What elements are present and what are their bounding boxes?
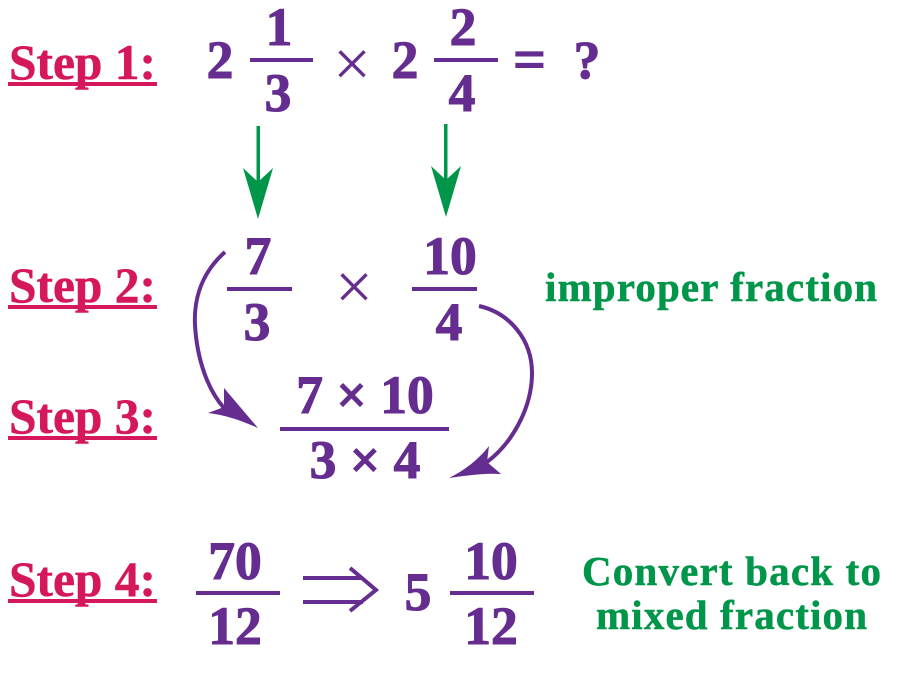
equation: step 1 mixed fractions: 2 <box>207 30 233 90</box>
heading: step 4: Step 4: <box>9 551 156 607</box>
equation: step 4 result: 70 <box>208 531 262 591</box>
arrow: second mixed fraction down <box>431 124 461 217</box>
equation: step 2 improper fractions: 4 <box>436 292 462 352</box>
heading: step 1: Step 1: <box>9 34 156 90</box>
equation: step 1 mixed fractions: 4 <box>449 63 475 123</box>
arrow: left curve to numerator <box>195 252 258 428</box>
equation: step 2 improper fractions: 3 <box>244 292 270 352</box>
arrow: right curve to denominator <box>449 306 532 478</box>
equation: step 4 result: 12 <box>208 596 262 656</box>
equation: step 1 mixed fractions: = <box>513 27 546 92</box>
equation: step 2 improper fractions: 10 <box>423 226 477 286</box>
equation: step 1 mixed fractions: 2 <box>392 30 418 90</box>
label: convert back to mixed fraction: mixed fraction <box>596 592 867 638</box>
equation: step 3 combined fraction <box>280 365 449 490</box>
equation: step 3 combined fraction: 7 × 10 <box>296 365 434 425</box>
equation: step 4 result: 5 <box>405 562 431 622</box>
equation: step 4 result: 10 <box>464 531 518 591</box>
equation: step 1 mixed fractions: 3 <box>265 63 291 123</box>
equation: step 1 mixed fractions <box>207 0 600 123</box>
equation: step 2 improper fractions: 7 <box>245 226 271 286</box>
label: convert back to mixed fraction: Convert back to <box>582 548 881 594</box>
heading: step 2: Step 2: <box>9 257 156 313</box>
equation: step 4 result <box>196 531 534 656</box>
heading: step 3: Step 3: <box>9 388 156 444</box>
label: convert back to mixed fraction <box>582 548 881 638</box>
equation: step 3 combined fraction: 3 × 4 <box>310 430 420 490</box>
equation: step 1 mixed fractions: × <box>333 27 371 101</box>
equation: step 2 improper fractions: × <box>335 250 373 324</box>
equation: step 4 result: 12 <box>464 596 518 656</box>
icon: implies arrow <box>303 568 376 611</box>
equation: step 2 improper fractions <box>227 226 477 352</box>
label: improper fraction: improper fraction <box>545 264 877 310</box>
arrow: first mixed fraction down <box>243 126 273 219</box>
equation: step 1 mixed fractions: ? <box>574 30 600 90</box>
